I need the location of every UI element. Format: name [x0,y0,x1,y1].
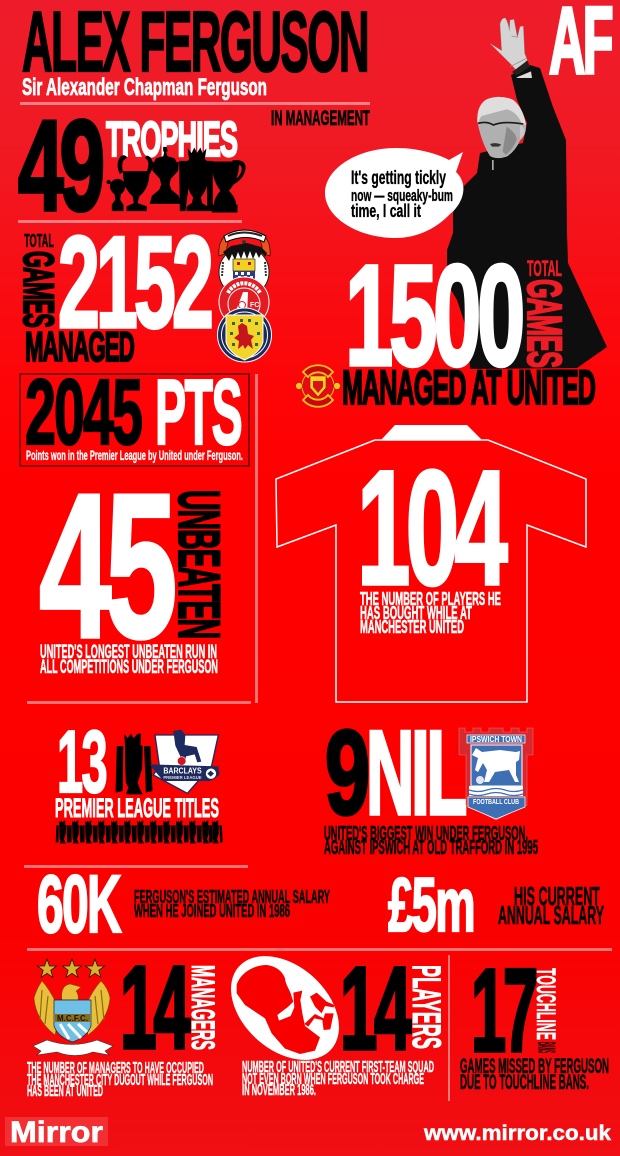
coat [447,65,607,369]
in management label: IN MANAGEMENT [271,107,370,130]
hand [490,18,527,71]
early salary caption: FERGUSON'S ESTIMATED ANNUAL SALARY [134,887,330,907]
unbeaten stat: ALL COMPETITIONS UNDER FERGUSON [40,657,218,678]
unbeaten stat [39,451,231,681]
text: PREMIER LEAGUE TITLES [55,793,219,823]
number 9: 9 [325,706,368,840]
head [477,97,526,158]
points caption: Points won in the Premier League by United under Ferguson. [26,447,243,463]
number 2152: 2152 [58,209,211,355]
total label: TOTAL [24,231,54,251]
Mirror wordmark: Mirror [10,1116,103,1149]
club crests [218,230,272,362]
icon: foetus [211,935,359,1081]
players stat: IN NOVEMBER 1986. [242,1082,316,1099]
Mirror logo [5,1116,108,1149]
speech bubble: time, I call it [351,201,421,221]
nine nil stat [324,706,538,859]
shirt with 104 stat: MANCHESTER UNITED [360,617,464,637]
number 104: 104 [357,436,507,619]
speech bubble: now — squeaky-bum [351,186,453,205]
salary row: WHEN HE JOINED UNITED IN 1986 [134,901,290,921]
60K: 60K [37,859,122,950]
number 13: 13 [57,712,106,811]
games vertical label: GAMES [14,251,62,327]
text: THE NUMBER OF MANAGERS TO HAVE OCCUPIED [27,1060,204,1077]
salary row [37,859,604,950]
points box [20,360,249,466]
crest: Manchester United [296,365,340,407]
unbeaten stat: UNITED'S LONGEST UNBEATEN RUN IN [40,642,217,663]
crest: East Stirlingshire [219,230,270,256]
£5m: £5m [388,863,474,948]
managed label: MANAGED [25,323,134,370]
managers stat: HAS BEEN AT UNITED [27,1083,103,1100]
managers stat [27,942,221,1100]
number 14: 14 [340,943,411,1075]
crest: Manchester City [33,959,113,1056]
shirt with 104 stat [276,425,586,702]
number 45: 45 [39,451,174,681]
PTS: PTS [155,360,241,464]
crest: Ipswich Town: IPSWICH TOWN [470,735,522,744]
managers stat: MANAGERS [185,965,221,1050]
crest: Aberdeen: FC [250,302,259,309]
crest: Ipswich Town: FOOTBALL CLUB [473,799,519,806]
shirt collar [381,425,482,440]
crest: Barclays Premier League: PREMIER LEAGUE [163,775,202,781]
quote text: It's getting tickly [351,168,446,189]
players stat [211,935,448,1099]
touchline bans stat [460,945,609,1094]
unbeaten stat: UNBEATEN [166,490,231,638]
number 49: 49 [18,94,102,238]
number 17: 17 [471,945,536,1077]
crest: Scotland [218,308,272,362]
crest: Barclays Premier League [149,730,219,793]
number 14: 14 [120,942,190,1074]
games vertical label: GAMES [517,279,570,367]
crest: Ipswich Town [459,728,533,820]
touchline bans stat: TOUCHLINE [531,968,561,1040]
NIL: NIL [366,706,466,840]
crest: St Mirren [219,243,269,297]
crest: Barclays Premier League: BARCLAYS [163,766,202,775]
wristwatch and cuff [512,61,530,75]
touchline bans stat: BANS [532,1042,560,1053]
icon: trophy silhouettes [107,147,245,212]
subtitle: Sir Alexander Chapman Ferguson [22,74,267,101]
total games at United stat: TOTAL [527,256,562,281]
trophies stat [18,94,245,238]
number 2045: 2045 [25,360,142,464]
speech bubble [325,148,463,238]
shirt with 104 stat: HAS BOUGHT WHILE AT [360,603,472,623]
shirt outline [276,440,586,702]
Premier League titles stat [55,712,223,843]
photo: Ferguson waving [447,18,607,369]
text: THE MANCHESTER CITY DUGOUT WHILE FERGUSON [27,1072,213,1089]
crest: Manchester City: M.C.F.C. [57,1014,88,1023]
icon: Premier League trophy [115,734,153,794]
website url: www.mirror.co.uk [423,1122,611,1145]
players stat: PLAYERS [404,965,448,1049]
icon: row of thirteen trophies [56,821,223,843]
total games managed stat [14,209,211,370]
total games at United stat [296,235,595,415]
trophies word: TROPHIES [106,113,237,167]
